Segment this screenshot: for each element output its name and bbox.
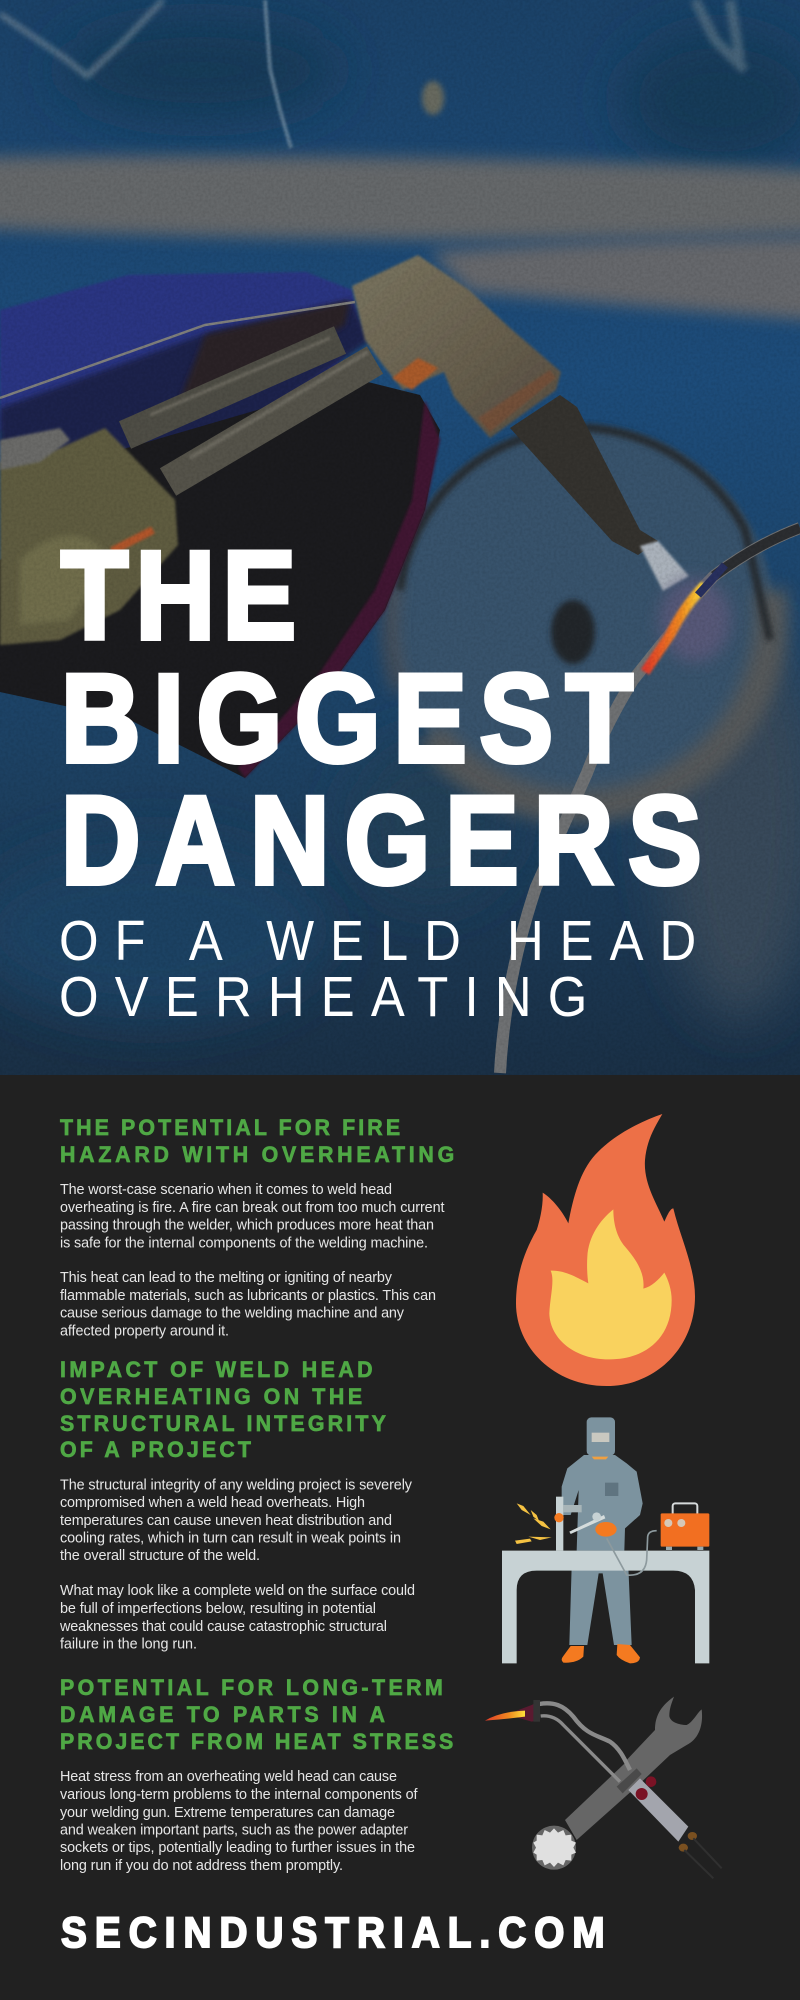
heading: heat stress damage: PROJECT FROM HEAT STRESS [60,1728,453,1754]
hand with torch [569,1512,617,1537]
heading: structural integrity [60,1356,386,1462]
body text: structural integrity: What may look like a complete weld on the surface could [60,1583,415,1599]
icon: welder at a table [502,1417,709,1663]
heading: structural integrity: STRUCTURAL INTEGRITY [60,1410,386,1436]
disc behind the torch [389,426,774,810]
subtitle: of a weld head overheating [61,920,694,1016]
body text: structural integrity: be full of imperfections below, resulting in potential [60,1601,376,1617]
heading: heat stress damage [60,1674,453,1754]
body text: fire hazard: overheating is fire. A fire can break out from too much current [60,1200,444,1216]
heading: heat stress damage: DAMAGE TO PARTS IN A [60,1701,385,1727]
wrench [532,1697,702,1870]
body text: structural integrity: failure in the long run. [60,1636,197,1652]
torch tubes [539,1703,630,1782]
torch nozzle [517,1700,540,1722]
filler wire and weld flame [500,528,800,1073]
torch flame [485,1711,525,1721]
body text: heat stress damage: Heat stress from an overheating weld head can cause [60,1769,397,1785]
sparks [515,1503,552,1544]
body text: fire hazard: is safe for the internal components of the welding machine. [60,1235,428,1251]
body text: heat stress damage: and weaken important parts, such as the power adapter [60,1822,408,1838]
body text: heat stress damage: your welding gun. Extreme temperatures can damage [60,1805,395,1821]
welding machine [661,1503,709,1550]
body text: heat stress damage: sockets or tips, potentially leading to further issues in the [60,1840,415,1856]
icon: flame [516,1114,695,1386]
hero photo: gloved hand with welding torch [0,0,800,1075]
section: structural integrity [59,1356,709,1663]
title: The Biggest Dangers: THE [61,525,296,665]
body text: structural integrity: temperatures can cause uneven heat distribution and [60,1513,392,1529]
table [502,1551,709,1663]
glove [0,272,440,778]
clamp pole [554,1497,582,1551]
body text: structural integrity: cooling rates, which in turn can result in weak points in [60,1530,401,1546]
body text: fire hazard: affected property around it. [60,1323,229,1339]
footer: website address: SECINDUSTRIAL.COM [61,1908,605,1956]
section: heat stress damage [60,1674,722,1878]
body text: fire hazard: The worst-case scenario when it comes to weld head [60,1182,392,1198]
heading: structural integrity: OF A PROJECT [60,1436,252,1462]
welding torch [0,255,689,645]
title: The Biggest Dangers: BIGGEST [61,648,633,788]
body text: fire hazard: flammable materials, such as lubricants or plastics. This can [60,1288,436,1304]
icon: crossed wrench and welding torch [485,1697,722,1878]
body text: structural integrity: weaknesses that could cause catastrophic structural [59,1619,387,1635]
body text: fire hazard: This heat can lead to the melting or igniting of nearby [60,1270,393,1286]
welder legs [569,1567,632,1645]
heading: structural integrity: OVERHEATING ON THE [60,1383,362,1409]
heading: fire hazard [60,1114,454,1167]
title: The Biggest Dangers: DANGERS [61,770,702,910]
section: fire hazard [60,1114,695,1386]
cable [607,1531,657,1575]
body text: heat stress damage [60,1769,418,1874]
boots [562,1644,640,1663]
title: The Biggest Dangers [60,550,700,887]
welder jacket [562,1455,643,1551]
body text: structural integrity [59,1477,415,1652]
heading: structural integrity: IMPACT OF WELD HEAD [60,1356,373,1382]
body text: structural integrity: The structural integrity of any welding project is severely [60,1477,413,1493]
heading: fire hazard: THE POTENTIAL FOR FIRE [60,1114,400,1140]
torch connectors [679,1832,722,1878]
body text: structural integrity: compromised when a weld head overheats. High [60,1495,365,1511]
body text: structural integrity: the overall structure of the weld. [60,1548,260,1564]
photo grain [0,0,800,842]
jacket pocket [605,1483,618,1496]
torch body [628,1778,688,1842]
welding hood [587,1417,615,1459]
body text: fire hazard: cause serious damage to the welding machine and any [60,1306,405,1322]
torch collar [617,1768,642,1793]
red buttons [636,1776,656,1800]
body text: fire hazard [60,1182,444,1339]
subtitle: of a weld head overheating: OVERHEATING [59,966,587,1029]
wrench ring gear [533,1828,576,1867]
heading: heat stress damage: POTENTIAL FOR LONG-TERM [60,1674,443,1700]
body text: heat stress damage: various long-term problems to the internal components of [60,1787,418,1803]
body text: heat stress damage: long run if you do not address them promptly. [60,1858,343,1874]
subtitle: of a weld head overheating: OF A WELD HEAD [59,910,696,973]
heading: fire hazard: HAZARD WITH OVERHEATING [60,1141,454,1167]
body text: fire hazard: passing through the welder, which produces more heat than [60,1218,434,1234]
